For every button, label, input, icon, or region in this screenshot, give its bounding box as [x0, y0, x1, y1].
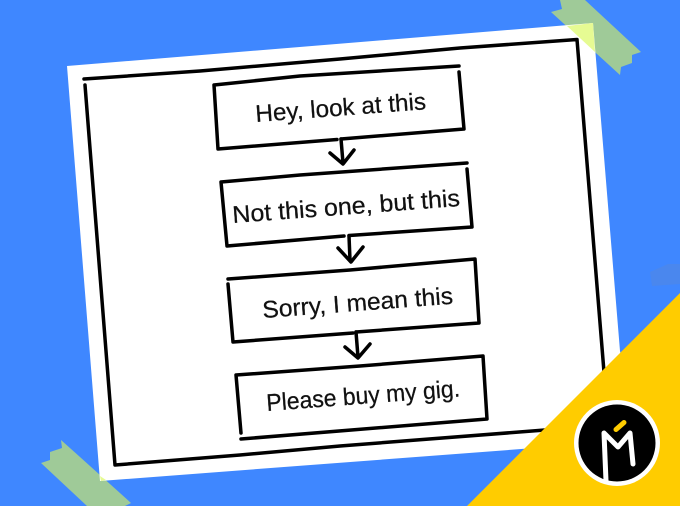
arrow 2 — [338, 236, 363, 262]
box 1 label: Hey, look at this — [254, 88, 427, 128]
logo disc — [578, 404, 656, 482]
yellow corner — [467, 293, 680, 506]
arrow 1 — [330, 139, 354, 164]
box 4 label: Please buy my gig. — [265, 376, 461, 417]
box 1 — [214, 66, 464, 149]
faint smudge — [650, 264, 680, 286]
box 3 outline — [228, 259, 479, 342]
outer hand-drawn frame — [84, 40, 604, 465]
logo ring — [574, 400, 660, 486]
tape overlap: bottom left — [100, 476, 106, 481]
box 1 outline — [214, 66, 464, 149]
box 3 — [228, 259, 479, 342]
logo accent — [616, 422, 624, 430]
paper sheet — [67, 23, 640, 481]
box 3 label: Sorry, I mean this — [261, 283, 454, 324]
box 4 outline — [236, 356, 487, 439]
arrow 3 — [345, 332, 370, 358]
box 2 label: Not this one, but this — [231, 185, 461, 229]
box 2 — [221, 163, 472, 246]
box 2 outline — [221, 163, 472, 246]
tape: top right — [551, 0, 641, 75]
tape: bottom left — [41, 440, 131, 506]
box 4 — [236, 356, 487, 439]
logo — [574, 400, 660, 486]
tape overlap: top right — [567, 23, 595, 52]
logo letter M — [604, 433, 633, 481]
